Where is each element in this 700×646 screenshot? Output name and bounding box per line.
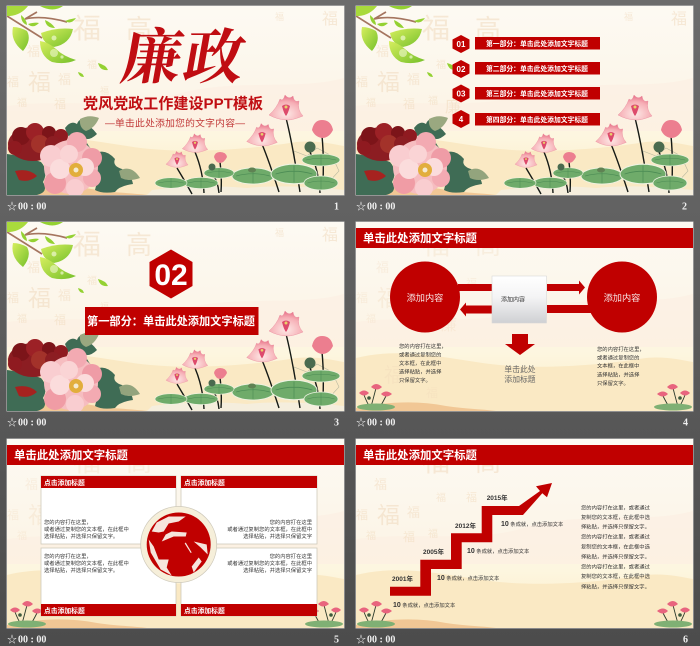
- right text block: 复制您的文本框，在此框中选: [581, 542, 651, 550]
- year labels: 2012年: [455, 521, 476, 530]
- watermark characters: 福: [671, 10, 687, 28]
- slide 1 footer: 00 : 00: [18, 202, 46, 212]
- watermark characters: 福: [58, 288, 71, 303]
- achievement captions: [393, 520, 564, 609]
- panel: bottom right: [181, 548, 317, 616]
- panel: top left: 选择粘贴，并选择只保留文字。: [44, 532, 118, 540]
- globe: [141, 506, 217, 582]
- watermark characters: 福: [322, 226, 338, 244]
- panel: bottom left: 您的内容打在这里，: [44, 552, 92, 560]
- right circle: 添加内容: [604, 292, 640, 303]
- watermark characters: 福: [377, 69, 400, 95]
- contents row 04: [452, 110, 600, 128]
- slide 3 footer: ☆: [7, 417, 17, 429]
- watermark characters: 福: [28, 285, 51, 311]
- slide 4 footer: 4: [683, 418, 688, 428]
- watermark characters: 福: [275, 11, 284, 22]
- slide 5 footer: 00 : 00: [18, 634, 46, 646]
- watermark characters: [8, 465, 150, 540]
- contents row 01: 第一部分：单击此处添加文字标题: [486, 39, 588, 48]
- watermark characters: 福: [374, 477, 387, 492]
- contents row 01: [452, 35, 600, 53]
- slide 3 footer: [7, 417, 339, 429]
- slide 6 footer: ☆: [356, 634, 366, 646]
- right text block: 择粘贴，并选择只保留文字。: [581, 582, 650, 590]
- arrow: left circle to box: [458, 284, 492, 291]
- panel: bottom right: 您的内容打在这里: [270, 552, 313, 560]
- watermark characters: 福: [422, 13, 450, 44]
- right text block: 您的内容打在这里，或者通过: [581, 532, 651, 540]
- slide 5 footer: ☆: [7, 634, 17, 646]
- watermark characters: 福: [17, 96, 27, 109]
- left text block: 只保留文字。: [399, 376, 431, 384]
- header bar: 单击此处添加文字标题: [14, 448, 129, 462]
- slide 4: flow diagram: [356, 222, 694, 412]
- year labels: 2001年: [392, 574, 413, 583]
- watermark characters: 福: [87, 274, 97, 287]
- watermark characters: 福: [27, 260, 40, 275]
- panel: top left: 点击添加标题: [44, 478, 85, 487]
- staircase arrow: [390, 483, 552, 596]
- watermark characters: 福: [54, 312, 66, 327]
- watermark characters: [7, 10, 338, 111]
- watermark characters: 福: [17, 529, 27, 542]
- watermark characters: 福: [428, 527, 438, 540]
- right text block: 择粘贴，并选择只保留文字。: [581, 522, 650, 530]
- panel: top right: 您的内容打在这里: [270, 518, 313, 526]
- watermark characters: 福: [73, 229, 101, 260]
- panel: bottom right: 点击添加标题: [184, 606, 225, 615]
- arrow: right circle to box: [547, 305, 591, 313]
- watermark characters: 福: [436, 491, 446, 504]
- slide 5 footer: 5: [334, 634, 339, 646]
- watermark characters: 福: [366, 96, 376, 109]
- header bar: 单击此处添加文字标题: [363, 448, 478, 462]
- panel: top right: 点击添加标题: [184, 478, 225, 487]
- slide 6 footer: 6: [683, 634, 688, 646]
- panel: bottom left: 点击添加标题: [44, 606, 85, 615]
- right text block: 文本框，在此框中: [597, 362, 639, 370]
- contents row 04: 4: [459, 115, 464, 124]
- watermark characters: 高: [126, 447, 152, 477]
- left circle: [390, 262, 460, 332]
- watermark characters: 福: [322, 10, 338, 28]
- corner flowers: [8, 601, 46, 628]
- header bar: [356, 228, 693, 248]
- watermark characters: 福: [377, 285, 400, 311]
- watermark characters: 福: [366, 529, 376, 542]
- watermark characters: 福: [436, 58, 446, 71]
- slide 2 footer: ☆: [356, 201, 366, 213]
- slide 1 footer: 1: [334, 202, 339, 212]
- panel: bottom left: 选择粘贴，并选择只保留文字。: [44, 566, 118, 574]
- watermark characters: 高: [126, 230, 152, 260]
- slide 1: cover: [6, 6, 344, 197]
- watermark characters: 高: [475, 230, 501, 260]
- watermark characters: [356, 10, 687, 116]
- slide 6 footer: 00 : 00: [367, 634, 395, 646]
- slide 4 footer: [356, 417, 688, 429]
- right text block: 只保留文字。: [597, 379, 629, 387]
- contents row 03: 03: [457, 90, 466, 98]
- watermark characters: 福: [384, 364, 404, 387]
- watermark characters: 福: [403, 96, 415, 111]
- center box: 添加内容: [501, 296, 525, 304]
- section title bar: 第一部分：单击此处添加文字标题: [87, 314, 255, 328]
- watermark characters: 福: [428, 94, 438, 107]
- watermark characters: 福: [466, 276, 477, 290]
- watermark characters: 福: [73, 13, 101, 44]
- slide 2 footer: [356, 201, 687, 213]
- panel: bottom right: 选择粘贴，并选择只保留文字: [243, 566, 312, 574]
- watermark characters: [356, 248, 498, 332]
- panel: bottom left: [41, 548, 176, 616]
- slide 2 footer: 00 : 00: [367, 202, 395, 212]
- panel: top left: 您的内容打在这里，: [44, 518, 92, 526]
- watermark characters: 福: [376, 44, 389, 59]
- watermark characters: 福: [275, 227, 284, 238]
- left text block: 您的内容打在这里，: [399, 342, 447, 350]
- panel: bottom right: 或者通过复制您的文本框，在此框中: [227, 559, 312, 567]
- header bar: [356, 445, 693, 465]
- contents row 02: 02: [457, 65, 466, 74]
- watermark characters: 福: [466, 490, 477, 504]
- tagline: —单击此处添加您的文字内容—: [105, 116, 245, 130]
- watermark characters: 福: [376, 260, 389, 275]
- watermark characters: 廉: [441, 316, 457, 334]
- watermark characters: 福: [422, 229, 450, 260]
- achievement captions: 10 条成就，点击添加文本: [393, 601, 456, 609]
- slide 5 footer: [7, 634, 339, 646]
- contents row 03: [452, 84, 600, 102]
- watermark characters: 福: [25, 477, 38, 492]
- watermark characters: 福: [422, 446, 450, 477]
- bottom label: 添加标题: [504, 374, 536, 384]
- slide 2: contents: [356, 6, 694, 197]
- arrow: box to left circle: [460, 302, 492, 316]
- bottom label: [504, 365, 536, 383]
- left circle: 添加内容: [407, 292, 443, 303]
- watermark characters: 福: [58, 72, 71, 87]
- section number hexagon: [150, 250, 192, 298]
- slide 1 footer: ☆: [7, 201, 17, 213]
- header bar: 单击此处添加文字标题: [363, 231, 478, 245]
- slide 4 footer: ☆: [356, 417, 366, 429]
- watermark characters: 福: [624, 11, 633, 22]
- watermark characters: 福: [7, 74, 19, 89]
- right text block: [581, 504, 651, 590]
- watermark characters: 福: [17, 312, 27, 325]
- watermark characters: [7, 226, 338, 327]
- corner flowers: [357, 601, 395, 628]
- section title bar: [85, 307, 258, 335]
- year labels: [392, 493, 508, 583]
- panel: top right: 选择粘贴，并选择只保留文字: [243, 532, 312, 540]
- right text block: 复制您的文本框，在此框中选: [581, 513, 651, 521]
- watermark characters: 福: [100, 85, 109, 96]
- watermark characters: 福: [87, 58, 97, 71]
- slide 2 footer: 2: [682, 202, 687, 212]
- main title: 廉政: [116, 10, 253, 96]
- left text block: 文本框，在此框中: [399, 359, 441, 367]
- contents row 04: 第四部分：单击此处添加文字标题: [486, 115, 588, 124]
- watermark characters: 福: [366, 312, 376, 325]
- right text block: 您的内容打在这里，或者通过: [581, 562, 651, 570]
- slide 3 footer: 00 : 00: [18, 418, 46, 428]
- contents row 03: 第三部分：单击此处添加文字标题: [486, 89, 588, 98]
- section number hexagon: 02: [154, 259, 188, 292]
- watermark characters: 福: [73, 446, 101, 477]
- panel: bottom left: 或者通过复制您的文本框，在此框中: [44, 559, 129, 567]
- watermark characters: 福: [377, 502, 400, 528]
- panel: top left: 或者通过复制您的文本框，在此框中: [44, 525, 129, 533]
- watermark characters: 福: [356, 290, 368, 305]
- right text block: [597, 346, 642, 386]
- left text block: 选择粘贴，并选择: [399, 368, 442, 376]
- slide 5: four panels with globe: [6, 438, 344, 628]
- watermark characters: 福: [28, 69, 51, 95]
- watermark characters: 高: [475, 447, 501, 477]
- watermark characters: 福: [356, 507, 368, 522]
- panel: top right: [181, 476, 317, 544]
- right text block: 您的内容打在这里，: [597, 345, 645, 353]
- watermark characters: 福: [407, 72, 420, 87]
- watermark characters: 福: [100, 301, 109, 312]
- right text block: 复制您的文本框，在此框中选: [581, 572, 651, 580]
- panel: top right: 或者通过复制您的文本框，在此框中: [227, 525, 312, 533]
- watermark characters: 福: [407, 505, 420, 520]
- bottom label: 单击此处: [504, 364, 536, 374]
- watermark characters: 福: [28, 502, 51, 528]
- header bar: [7, 445, 344, 465]
- subtitle: 党风党政工作建设PPT模板: [83, 94, 263, 112]
- watermark characters: 高: [126, 14, 152, 44]
- watermark characters: 福: [403, 529, 415, 544]
- watermark characters: 福: [426, 385, 438, 400]
- year labels: 2015年: [487, 493, 508, 502]
- slide 6 footer: [356, 634, 688, 646]
- contents row 02: [452, 60, 600, 78]
- achievement captions: 10 条成就，点击添加文本: [437, 574, 500, 582]
- watermark characters: 福: [7, 507, 19, 522]
- watermark characters: 福: [356, 74, 368, 89]
- left text block: [399, 343, 444, 382]
- year labels: 2005年: [423, 547, 444, 556]
- left text block: 或者通过复制您的: [399, 350, 441, 358]
- watermark characters: 高: [475, 14, 501, 44]
- achievement captions: 10 条成就，点击添加文本: [467, 547, 530, 555]
- contents row 02: 第二部分：单击此处添加文字标题: [486, 64, 588, 73]
- watermark characters: 福: [27, 44, 40, 59]
- right circle: [587, 262, 657, 332]
- corner flowers: [357, 384, 395, 410]
- slide 1 footer: [7, 201, 339, 213]
- watermark characters: 廉: [445, 98, 461, 116]
- slide 3: section divider: [6, 222, 344, 413]
- contents row 01: 01: [457, 40, 466, 49]
- arrow: box to right circle: [547, 280, 585, 294]
- right text block: 或者通过复制您的: [597, 354, 639, 362]
- right text block: 您的内容打在这里，或者通过: [581, 504, 651, 512]
- watermark characters: 福: [7, 290, 19, 305]
- panel: top left: [41, 476, 176, 544]
- center box: [492, 276, 546, 323]
- slide 3 footer: 3: [334, 418, 339, 428]
- watermark characters: [356, 446, 501, 544]
- right text block: 选择粘贴，并选择: [597, 370, 640, 378]
- right text block: 择粘贴，并选择只保留文字。: [581, 552, 650, 560]
- slide 6: staircase timeline: [356, 438, 694, 628]
- achievement captions: 10 条成就，点击添加文本: [501, 520, 564, 528]
- down arrow: [505, 334, 535, 355]
- slide 4 footer: 00 : 00: [367, 418, 395, 428]
- watermark characters: 福: [54, 96, 66, 111]
